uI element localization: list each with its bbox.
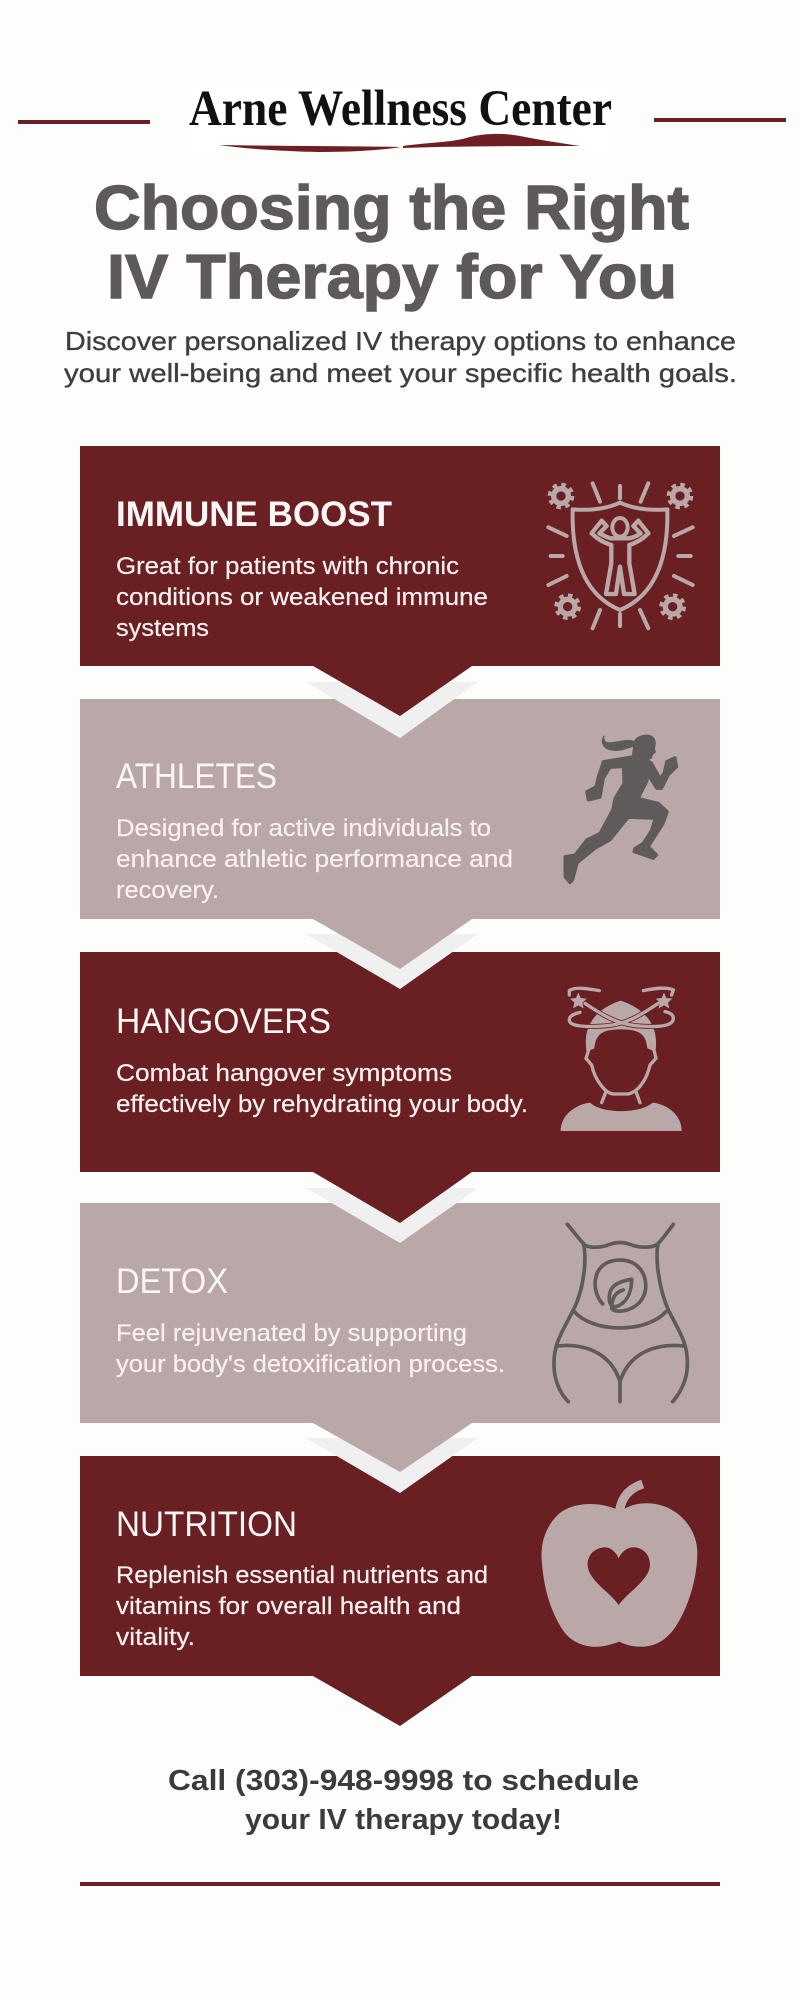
icon: apple with heart [541, 1484, 697, 1647]
arrow chevron: athletes [306, 934, 478, 989]
arrow chevron: immune boost [306, 682, 478, 738]
subtitle: your well-being and meet your specific health goals. [64, 358, 737, 388]
panel: detox [80, 1203, 720, 1493]
text: immune boost description: systems [116, 615, 209, 642]
panel: athletes [80, 699, 720, 989]
icon: dizzy head [561, 988, 682, 1131]
text: immune boost description [116, 553, 488, 642]
text: athletes description: recovery. [116, 877, 219, 904]
arrow chevron: hangovers [306, 1188, 478, 1243]
title: IV Therapy for You [107, 243, 677, 312]
text: detox description [116, 1320, 505, 1378]
text: athletes description: Designed for active individuals to [116, 815, 491, 842]
heading: detox: DETOX [116, 1262, 228, 1301]
text: hangovers description: effectively by rehydrating your body. [116, 1091, 528, 1118]
panel: immune boost [80, 446, 720, 738]
text: nutrition description: vitality. [116, 1624, 195, 1651]
heading: nutrition: NUTRITION [116, 1505, 297, 1544]
panel: nutrition [80, 1456, 720, 1726]
call to action: Call (303)-948-9998 to schedule [168, 1765, 639, 1797]
text: immune boost description: Great for patients with chronic [116, 553, 459, 580]
text: athletes description [116, 815, 513, 904]
heading: hangovers: HANGOVERS [116, 1002, 331, 1041]
text: hangovers description: Combat hangover symptoms [116, 1060, 452, 1087]
subtitle: Discover personalized IV therapy options to enhance [65, 326, 736, 356]
call to action [168, 1765, 639, 1836]
header logo band [18, 81, 786, 153]
heading: immune boost: IMMUNE BOOST [116, 495, 392, 534]
icon: torso with leaf [554, 1224, 687, 1402]
arrow chevron: detox [306, 1438, 478, 1493]
logo: Arne Wellness Center: Arne Wellness Center [189, 81, 612, 137]
icon: shield with person and gears [548, 483, 693, 628]
text: nutrition description: Replenish essential nutrients and [116, 1562, 488, 1589]
text: hangovers description [116, 1060, 528, 1118]
heading: athletes: ATHLETES [116, 757, 277, 796]
call to action: your IV therapy today! [245, 1804, 562, 1836]
subtitle [64, 326, 737, 388]
text: athletes description: enhance athletic performance and [116, 846, 513, 873]
icon: runner silhouette [565, 736, 677, 883]
title: Choosing the Right [94, 174, 689, 243]
text: detox description: Feel rejuvenated by supporting [116, 1320, 467, 1347]
panel: hangovers [80, 952, 720, 1243]
text: immune boost description: conditions or weakened immune [116, 584, 488, 611]
text: nutrition description: vitamins for overall health and [116, 1593, 461, 1620]
text: detox description: your body's detoxification process. [116, 1351, 505, 1378]
title [94, 174, 689, 312]
text: nutrition description [116, 1562, 488, 1651]
